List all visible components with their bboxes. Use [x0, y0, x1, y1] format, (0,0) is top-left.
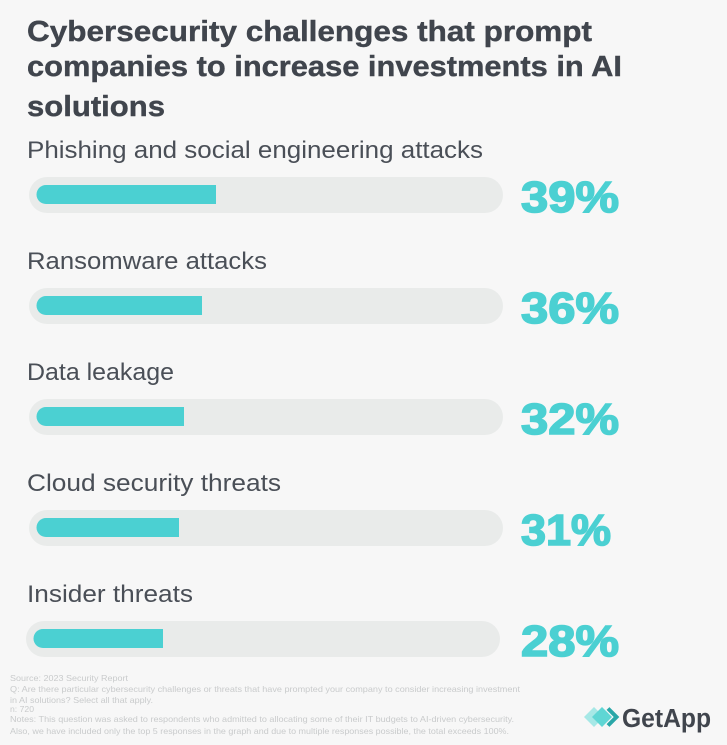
value: 28%: 28%: [521, 617, 619, 666]
wordmark: GetApp: [622, 705, 711, 733]
footnotes: in AI solutions? Select all that apply.: [10, 695, 153, 705]
title: Cybersecurity challenges that prompt: [27, 16, 592, 48]
footnotes: Also, we have included only the top 5 responses in the graph and due to multiple responses possible, the total exceeds 100%.: [10, 726, 509, 736]
footnotes: Source: 2023 Security Report: [10, 673, 129, 683]
footnotes: n: 720: [10, 704, 34, 714]
value: 32%: 32%: [521, 395, 619, 444]
value: 39%: 39%: [521, 173, 619, 222]
bar: Insider threats 28%: [26, 621, 500, 657]
value: 36%: 36%: [521, 284, 619, 333]
title: companies to increase investments in AI: [27, 51, 622, 83]
label: Cloud security threats: Cloud security threats: [27, 470, 281, 497]
footnotes: Q: Are there particular cybersecurity challenges or threats that have prompted your company to consider increasing investment: [10, 684, 521, 694]
label: Phishing: Phishing and social engineering attacks: [27, 137, 483, 164]
bar: Cloud security threats 31%: [29, 510, 503, 546]
footnotes: [10, 673, 521, 736]
row: Insider threats 28%: [26, 581, 619, 666]
value: 31%: 31%: [521, 506, 611, 555]
title: [27, 16, 622, 123]
row: Data leakage 32%: [27, 359, 619, 444]
title: solutions: [27, 91, 165, 123]
bar: Ransomware 36%: [29, 288, 503, 324]
footnotes: Notes: This question was asked to respondents who admitted to allocating some of their IT budgets to AI-driven cybersecurity.: [10, 714, 514, 724]
icon: GetApp chevrons: [584, 707, 616, 727]
row: Phishing and social engineering attacks 39%: [27, 137, 619, 222]
label: Insider threats: Insider threats: [27, 581, 193, 608]
label: Data leakage: Data leakage: [27, 359, 174, 386]
row: Ransomware attacks 36%: [27, 248, 619, 333]
bar: Data leakage 32%: [29, 399, 503, 435]
label: Ransomware: Ransomware attacks: [27, 248, 267, 275]
logo: GetApp: [584, 705, 711, 733]
bar: Phishing 39%: [29, 177, 503, 213]
row: Cloud security threats 31%: [27, 470, 611, 555]
